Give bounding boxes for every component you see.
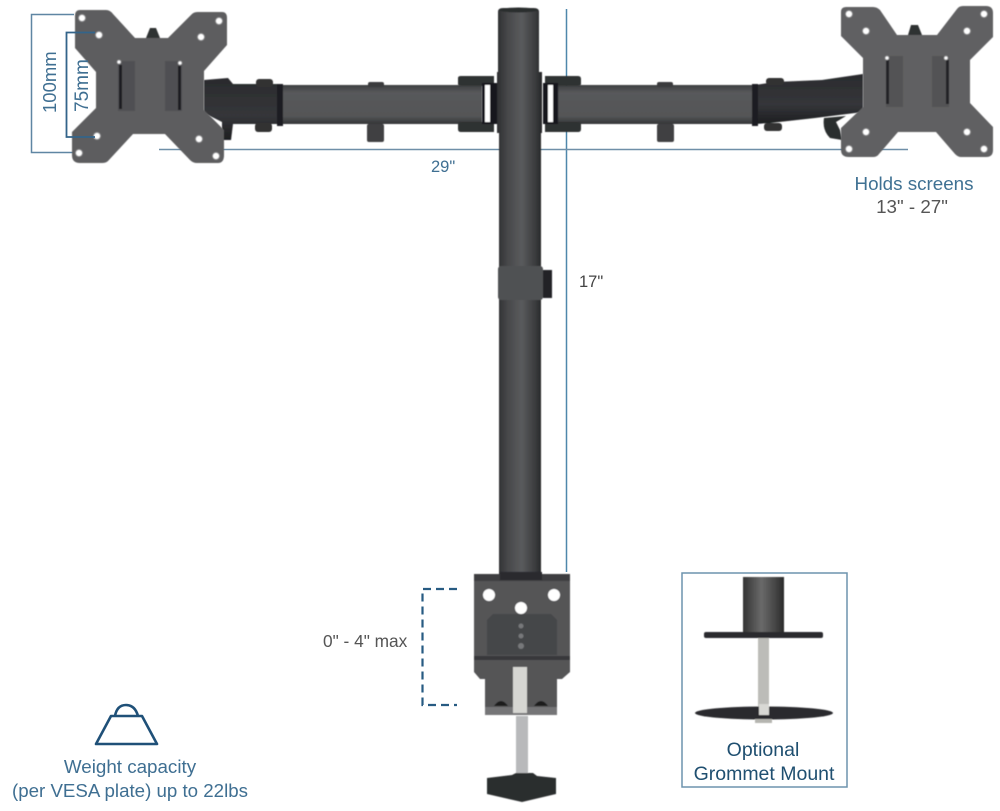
clamp jaw	[485, 701, 557, 715]
left VESA plate	[72, 10, 227, 163]
icon: weight	[96, 705, 157, 744]
left arm elbow	[204, 78, 282, 140]
right arm assembly	[557, 74, 863, 142]
panel border	[682, 573, 847, 787]
clamp knob	[487, 773, 556, 802]
dimension line: 29 inch width	[159, 148, 908, 150]
central pole	[458, 8, 581, 578]
weight capacity block	[12, 705, 248, 801]
label: clamp range: 0" - 4" max	[323, 631, 408, 651]
left arm knobs	[367, 82, 384, 142]
grommet caption: Grommet Mount	[694, 763, 835, 785]
right VESA plate	[841, 6, 993, 157]
dimension line: 17 inch height	[566, 9, 568, 572]
label: 100mm bracket: 100mm	[39, 51, 60, 113]
grommet illustration	[695, 577, 833, 723]
label: 100mm bracket	[32, 14, 74, 152]
desk clamp	[474, 572, 570, 802]
label: holds screens: Holds screens	[854, 173, 974, 194]
left arm assembly	[204, 78, 482, 142]
label: 17 inches: 17"	[579, 273, 603, 291]
label: 75mm bracket	[66, 32, 95, 137]
label: 75mm bracket: 75mm	[72, 59, 93, 112]
right arm knobs	[657, 82, 674, 142]
left arm tube	[282, 85, 482, 124]
label: 29 inches: 29"	[431, 158, 455, 176]
clamp top plate	[474, 574, 570, 715]
pole tube	[497, 8, 542, 578]
clamp inner panel	[474, 614, 570, 660]
weight text: Weight capacity	[64, 756, 197, 777]
grommet caption: Optional	[727, 739, 799, 761]
right arm elbow	[755, 74, 863, 140]
clamp screw	[513, 667, 528, 774]
lower bracket	[458, 122, 581, 132]
upper bracket	[458, 76, 581, 86]
hinge gaps	[482, 83, 558, 124]
grommet mount panel	[682, 573, 847, 787]
height collar	[498, 266, 552, 300]
clamp range bracket	[422, 589, 457, 705]
right arm tube	[557, 85, 754, 124]
label: holds screens: 13" - 27"	[876, 196, 948, 217]
clamp holes	[483, 589, 560, 614]
weight text: (per VESA plate) up to 22lbs	[12, 780, 248, 801]
